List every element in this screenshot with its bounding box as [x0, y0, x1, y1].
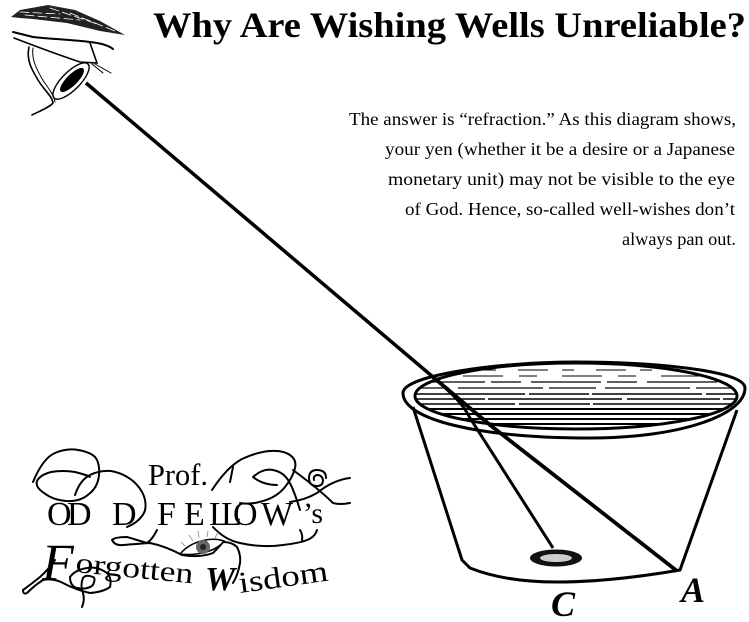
text block: explanation: your yen (whether it be a desire or a Japanese: [385, 139, 735, 159]
refracted ray to coin: [433, 377, 553, 548]
rim: [415, 363, 737, 429]
arrow: line of sight into the well: [86, 83, 433, 377]
coin: [530, 550, 582, 566]
Forgotten: orgotten: [74, 547, 195, 590]
title: Why Are Wishing Wells Unreliable?: [153, 5, 746, 45]
icon: engraved eye: [11, 5, 125, 115]
Oddfellow's: [47, 496, 323, 533]
diagram: wishing well bucket: [360, 362, 745, 582]
Wisdom: isdom: [236, 555, 330, 600]
text block: explanation: always pan out.: [622, 229, 736, 249]
bucket walls: [413, 407, 737, 582]
Oddfellow's: ’s: [303, 497, 323, 530]
text block: explanation: [349, 109, 736, 249]
Forgotten: [41, 535, 195, 592]
label: A: A: [679, 570, 705, 610]
Wisdom: [205, 555, 330, 600]
Forgotten: F: [41, 535, 75, 592]
logo flourishes: [23, 449, 350, 607]
logo: Prof. Oddfellow's Forgotten Wisdom: [23, 449, 350, 607]
text block: explanation: The answer is “refraction.” As this diagram shows,: [349, 109, 736, 129]
text block: explanation: monetary unit) may not be visible to the eye: [388, 169, 735, 189]
Prof.: Prof.: [148, 457, 208, 492]
water surface: [416, 370, 736, 425]
Oddfellow's: ODD: [47, 496, 137, 533]
text block: explanation: of God. Hence, so-called well-wishes don’t: [405, 199, 735, 219]
Oddfellow's: FELLOW: [157, 496, 294, 533]
eye emblem: [180, 531, 224, 554]
ray to apparent position: [433, 377, 677, 571]
Wisdom: W: [205, 561, 238, 598]
